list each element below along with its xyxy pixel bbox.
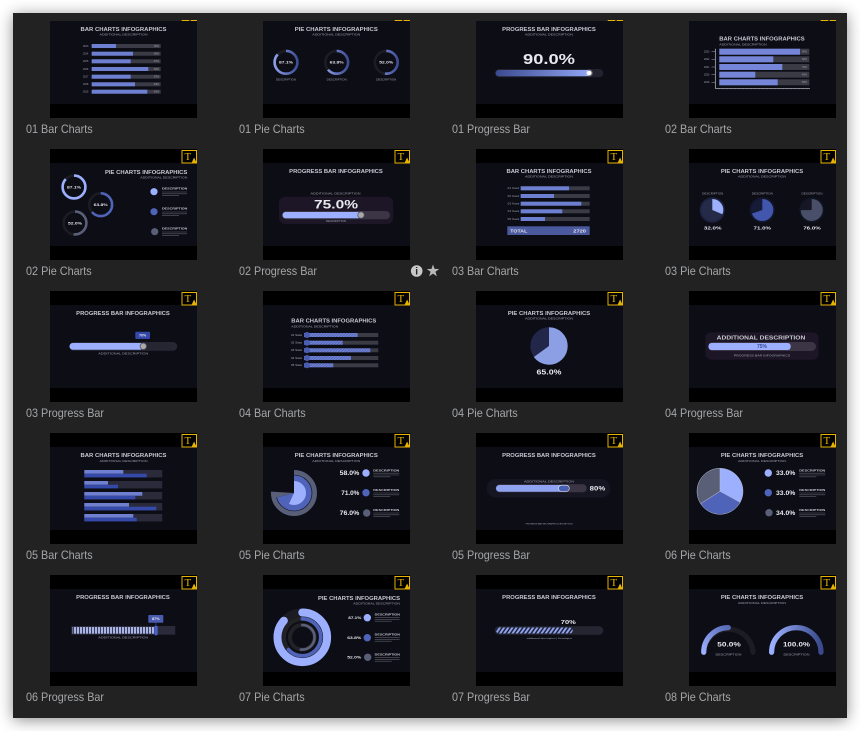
thumbnail labels: 02 Pie Charts: [26, 264, 92, 278]
bar chart with axes: 90%: [802, 51, 808, 54]
total row: 2720: [573, 228, 587, 233]
value: 70%: [561, 620, 576, 626]
bar chart with axes: 2019: [704, 81, 710, 84]
half-gauge: 50%: DESCRIPTION: [716, 652, 742, 656]
thumbnail: 07 Progress Bar: additional description | Developer: [527, 637, 572, 640]
half-gauge: 50%: 50.0%: [717, 642, 741, 649]
heading: PIE CHARTS INFOGRAPHICS: [105, 170, 188, 176]
icon: missing font warning: [395, 150, 410, 163]
bar chart: 35%: [154, 45, 160, 48]
thumbnail labels: 05 Pie Charts: [239, 548, 305, 562]
legend: [150, 187, 187, 236]
big value: 90.0%: [523, 52, 575, 68]
icon: star: [427, 264, 439, 276]
legend: DESCRIPTION: [162, 227, 187, 231]
legend: DESCRIPTION: [375, 613, 400, 617]
icon: missing font warning: T: [824, 151, 830, 163]
bar chart with axes: 2022: [704, 58, 710, 61]
striped bar chart: [291, 332, 378, 368]
thumbnail labels: 04 Progress Bar: [665, 406, 743, 420]
legend: DESCRIPTION: [375, 633, 400, 637]
bar chart with axes: 40%: [802, 74, 808, 77]
thumbnail: 04 Pie Charts: [476, 291, 623, 402]
icon: missing font warning: T: [398, 293, 404, 305]
thumbnail: 05 Bar Charts: [50, 433, 197, 544]
icon: info: [411, 265, 423, 278]
icon: missing font warning: [395, 576, 410, 589]
thumbnail: 08 Pie Charts: ADDITIONAL DESCRIPTION: [738, 601, 786, 605]
heading: BAR CHARTS INFOGRAPHICS: [506, 169, 592, 175]
thumbnail: 05 Pie Charts: ADDITIONAL DESCRIPTION: [312, 459, 360, 463]
progress bar: [495, 69, 603, 77]
thumbnail: 03 Progress Bar: [50, 291, 197, 402]
legend: 33.0%: [776, 491, 796, 497]
pie charts: 76.0%: [803, 225, 821, 230]
thumbnail labels: 06 Progress Bar: [26, 690, 104, 704]
progress card: PROGRESS BAR INFOGRAPHICS: [734, 353, 790, 357]
icon: missing font warning: [182, 434, 197, 447]
bar chart: 81%: [154, 91, 160, 94]
bar chart: [508, 186, 590, 221]
thumbnail: 01 Pie Charts: 63.8%: [330, 61, 345, 65]
icon: missing font warning: T: [610, 435, 618, 447]
pie charts: DESCRIPTION: [752, 191, 773, 195]
icon: missing font warning: [821, 576, 836, 589]
total row: [507, 226, 590, 235]
icon: missing font warning: T: [398, 151, 404, 163]
thumbnail: 04 Pie Charts: ADDITIONAL DESCRIPTION: [525, 317, 573, 321]
half-gauge: 100%: 100.0%: [783, 642, 810, 649]
thumbnail: 06 Pie Charts: [689, 433, 836, 544]
progress card: [487, 479, 610, 498]
bar chart: 2013: [83, 45, 89, 48]
pie charts: [700, 191, 824, 230]
thumbnail labels: 02 Progress Bar: [239, 264, 317, 278]
thumbnail labels: 05 Progress Bar: [452, 548, 530, 562]
progress card: 75%: [757, 344, 768, 350]
donut charts: [275, 51, 398, 74]
legend: 87.1%: [348, 616, 362, 620]
heading: PROGRESS BAR INFOGRAPHICS: [502, 595, 596, 601]
striped progress bar: [495, 626, 603, 635]
icon: missing font warning: [182, 292, 197, 305]
legend: DESCRIPTION: [375, 653, 400, 657]
thumbnail: 03 Pie Charts: [689, 149, 836, 260]
bar chart with axes: 65%: [802, 81, 808, 84]
icon: missing font warning: T: [824, 577, 830, 589]
thumbnail: 02 Pie Charts: 87.1%: [67, 185, 82, 189]
thumbnail: 02 Pie Charts: ADDITIONAL DESCRIPTION: [140, 176, 187, 180]
icon: info: i: [415, 267, 418, 278]
thumbnail: 01 Pie Charts: 87.1%: [279, 61, 294, 65]
heading: PIE CHARTS INFOGRAPHICS: [721, 595, 804, 601]
legend: 52.0%: [347, 656, 362, 660]
icon: missing font warning: T: [610, 577, 618, 589]
progress bar: [69, 342, 177, 351]
thumbnail: 03 Progress Bar: ADDITIONAL DESCRIPTION: [98, 352, 148, 356]
legend: 63.8%: [347, 636, 362, 640]
thumbnail: 02 Pie Charts: 52.0%: [68, 221, 83, 225]
thumbnail labels: 07 Progress Bar: [452, 690, 530, 704]
thumbnail labels: 01 Pie Charts: [239, 122, 305, 136]
bar chart: 2017: [83, 76, 89, 79]
thumbnail labels: 08 Pie Charts: [665, 690, 731, 704]
value tag: 70%: [139, 334, 147, 338]
progress card: 75.0%: [314, 197, 358, 211]
heading: PIE CHARTS INFOGRAPHICS: [508, 311, 591, 317]
progress card: ADDITIONAL DESCRIPTION: [717, 335, 805, 341]
pie charts: 32.0%: [704, 225, 721, 230]
icon: missing font warning: T: [184, 151, 192, 163]
thumbnail labels: 01 Bar Charts: [26, 122, 93, 136]
bar chart: 57%: [154, 76, 160, 79]
heading: PIE CHARTS INFOGRAPHICS: [318, 596, 400, 602]
thumbnail labels: 03 Progress Bar: [26, 406, 104, 420]
thumbnail: 01 Pie Charts: ADDITIONAL DESCRIPTION: [312, 33, 360, 37]
thumbnail: 01 Pie Charts: 52.0%: [379, 61, 394, 65]
bar chart with axes: 2023: [704, 51, 710, 54]
legend: DESCRIPTION: [799, 508, 825, 512]
thumbnail labels: 03 Pie Charts: [665, 264, 731, 278]
legend: 34.0%: [776, 511, 796, 517]
thumbnail: 03 Bar Charts: [476, 149, 623, 260]
thumbnail: 08 Pie Charts: [689, 575, 836, 686]
icon: missing font warning: T: [184, 293, 192, 305]
heading: PROGRESS BAR INFOGRAPHICS: [502, 453, 596, 459]
legend: DESCRIPTION: [799, 488, 825, 492]
thumbnail: 06 Pie Charts: ADDITIONAL DESCRIPTION: [738, 459, 786, 463]
icon: missing font warning: [821, 434, 836, 447]
pie charts: 71.0%: [754, 225, 771, 230]
value tag: [135, 332, 150, 339]
progress card: DESCRIPTION: [326, 219, 346, 223]
icon: missing font warning: T: [610, 151, 618, 163]
footer text: PROGRESS BAR INFOGRAPHICS DESCRIPTION: [526, 522, 573, 526]
bar chart: 2018: [83, 83, 89, 86]
legend: DESCRIPTION: [373, 468, 399, 472]
icon: missing font warning: [182, 150, 197, 163]
thumbnail: 01 Progress Bar: [476, 20, 623, 118]
progress card: [705, 332, 819, 360]
thumbnail labels: 03 Bar Charts: [452, 264, 519, 278]
thumbnail: 02 Bar Charts: ADDITIONAL DESCRIPTION: [719, 42, 767, 46]
bar chart: 2014: [83, 53, 89, 56]
thumbnail: 03 Bar Charts: ADDITIONAL DESCRIPTION: [525, 175, 573, 179]
bar chart: [83, 44, 161, 94]
legend: [347, 613, 400, 661]
legend: DESCRIPTION: [373, 508, 399, 512]
bar chart with axes: 70%: [802, 66, 808, 69]
icon: missing font warning: T: [610, 293, 618, 305]
bar chart: 82%: [154, 68, 160, 71]
striped bar chart: 03 Stats: [291, 349, 303, 352]
icon: missing font warning: [608, 150, 623, 163]
grouped bar chart: [84, 470, 162, 521]
striped bar chart: 04 Stats: [291, 357, 303, 360]
thumbnail: 01 Pie Charts: DESCRIPTION: [376, 77, 396, 81]
thumbnail: 02 Progress Bar: [263, 149, 410, 260]
thumbnail: 05 Progress Bar: [476, 433, 623, 544]
concentric ring chart: [278, 612, 327, 662]
progress card: ADDITIONAL DESCRIPTION: [524, 479, 574, 483]
bar chart: 01 Years: [508, 187, 520, 190]
bar chart: 2016: [83, 68, 89, 71]
heading: BAR CHARTS INFOGRAPHICS: [719, 36, 805, 42]
striped bar chart: 01 Stats: [291, 334, 303, 337]
icon: missing font warning: [608, 576, 623, 589]
heading: PIE CHARTS INFOGRAPHICS: [721, 453, 804, 459]
layered pie chart: [282, 482, 306, 504]
total row: TOTAL: [510, 228, 528, 233]
heading: PIE CHARTS INFOGRAPHICS: [295, 27, 378, 33]
icon: missing font warning: T: [824, 435, 830, 447]
thumbnail: 03 Pie Charts: ADDITIONAL DESCRIPTION: [738, 175, 786, 179]
thumbnail labels: 02 Bar Charts: [665, 122, 732, 136]
value: 65.0%: [536, 368, 562, 377]
bar chart: 2015: [83, 60, 89, 63]
bar chart: 05 Years: [508, 218, 520, 221]
thumbnail labels: 05 Bar Charts: [26, 548, 93, 562]
bar chart: 57%: [154, 60, 160, 63]
bar chart with axes: [704, 49, 810, 89]
half-gauge: 50%: [704, 628, 753, 656]
icon: missing font warning: [608, 292, 623, 305]
legend: [765, 468, 825, 517]
thumbnail labels: [26, 122, 743, 704]
legend: DESCRIPTION: [162, 207, 187, 211]
bar chart: 04 Years: [508, 210, 520, 213]
pie charts: DESCRIPTION: [802, 191, 822, 195]
thumbnail: 02 Progress Bar: ADDITIONAL DESCRIPTION: [310, 191, 360, 195]
thumbnail: 07 Pie Charts: [263, 575, 410, 686]
thumbnail labels: 04 Bar Charts: [239, 406, 306, 420]
icon: missing font warning: [608, 434, 623, 447]
legend: 33.0%: [776, 471, 796, 477]
thumbnail: 06 Progress Bar: ADDITIONAL DESCRIPTION: [98, 635, 148, 639]
heading: PROGRESS BAR INFOGRAPHICS: [502, 27, 596, 33]
icon: missing font warning: [182, 576, 197, 589]
icon: missing font warning: [821, 292, 836, 305]
icon: missing font warning: [395, 434, 410, 447]
thumbnail: 01 Progress Bar: ADDITIONAL DESCRIPTION: [525, 33, 573, 37]
heading: BAR CHARTS INFOGRAPHICS: [80, 27, 167, 33]
legend: 71.0%: [341, 491, 360, 497]
heading: PROGRESS BAR INFOGRAPHICS: [76, 595, 170, 601]
segmented progress bar: [71, 626, 175, 635]
thumbnail: 04 Bar Charts: [263, 291, 410, 402]
heading: PROGRESS BAR INFOGRAPHICS: [76, 311, 170, 317]
thumbnail: 02 Bar Charts: [689, 20, 836, 118]
bar chart: 60%: [154, 53, 160, 56]
bar chart with axes: 2020: [704, 74, 710, 77]
thumbnail labels: 06 Pie Charts: [665, 548, 731, 562]
legend: 76.0%: [340, 511, 360, 517]
thumbnail labels: 01 Progress Bar: [452, 122, 530, 136]
legend: 58.0%: [340, 471, 360, 477]
legend: DESCRIPTION: [799, 468, 825, 472]
thumbnail: 02 Pie Charts: 63.8%: [94, 203, 109, 207]
thumbnail: 01 Bar Charts: ADDITIONAL DESCRIPTION: [100, 33, 148, 37]
striped bar chart: 02 Stats: [291, 342, 303, 345]
heading: PIE CHARTS INFOGRAPHICS: [295, 453, 378, 459]
thumbnail: 04 Progress Bar: [689, 291, 836, 402]
thumbnail: 01 Pie Charts: DESCRIPTION: [327, 77, 347, 81]
thumbnail: 07 Progress Bar: [476, 575, 623, 686]
heading: PROGRESS BAR INFOGRAPHICS: [289, 169, 383, 175]
icon: missing font warning: T: [824, 293, 830, 305]
thumbnail: 05 Pie Charts: [263, 433, 410, 544]
pie charts: DESCRIPTION: [702, 191, 723, 195]
icon: missing font warning: [821, 150, 836, 163]
pie chart: [530, 327, 568, 365]
thumbnail: 01 Pie Charts: DESCRIPTION: [276, 77, 296, 81]
value tag: 87%: [152, 617, 160, 621]
bar chart: 03 Years: [508, 203, 520, 206]
thumbnail: 01 Pie Charts: [263, 20, 410, 118]
bar chart with axes: 2021: [704, 66, 710, 69]
half-gauge: 100%: [772, 628, 821, 656]
pie chart: [697, 468, 743, 514]
progress card: 80%: [590, 486, 606, 492]
heading: PIE CHARTS INFOGRAPHICS: [721, 169, 804, 175]
thumbnail: 07 Pie Charts: ADDITIONAL DESCRIPTION: [353, 601, 400, 605]
thumbnail labels: 04 Pie Charts: [452, 406, 518, 420]
bar chart with axes: 60%: [802, 58, 808, 61]
value tag: [148, 615, 163, 626]
icon: missing font warning: T: [398, 435, 404, 447]
half-gauge: 100%: DESCRIPTION: [784, 652, 810, 656]
icon: missing font warning: T: [184, 577, 192, 589]
bar chart: 2019: [83, 91, 89, 94]
thumbnail: 02 Pie Charts: [50, 149, 197, 260]
thumbnail: 06 Progress Bar: [50, 575, 197, 686]
bar chart: 02 Years: [508, 195, 520, 198]
thumbnail: 01 Bar Charts: [50, 20, 197, 118]
icon: missing font warning: [395, 292, 410, 305]
legend: DESCRIPTION: [373, 488, 399, 492]
legend: [340, 468, 399, 517]
striped bar chart: 05 Stats: [291, 364, 303, 367]
thumbnail: 04 Bar Charts: ADDITIONAL DESCRIPTION: [291, 325, 338, 329]
legend: DESCRIPTION: [162, 187, 187, 191]
icon: missing font warning: T: [398, 577, 404, 589]
bar chart: 63%: [154, 83, 160, 86]
donut charts: [63, 176, 112, 234]
progress card: [279, 197, 393, 224]
thumbnail labels: 07 Pie Charts: [239, 690, 305, 704]
icon: missing font warning: T: [184, 435, 192, 447]
thumbnail: 05 Bar Charts: ADDITIONAL DESCRIPTION: [100, 459, 148, 463]
heading: BAR CHARTS INFOGRAPHICS: [80, 453, 167, 459]
heading: BAR CHARTS INFOGRAPHICS: [291, 318, 377, 324]
